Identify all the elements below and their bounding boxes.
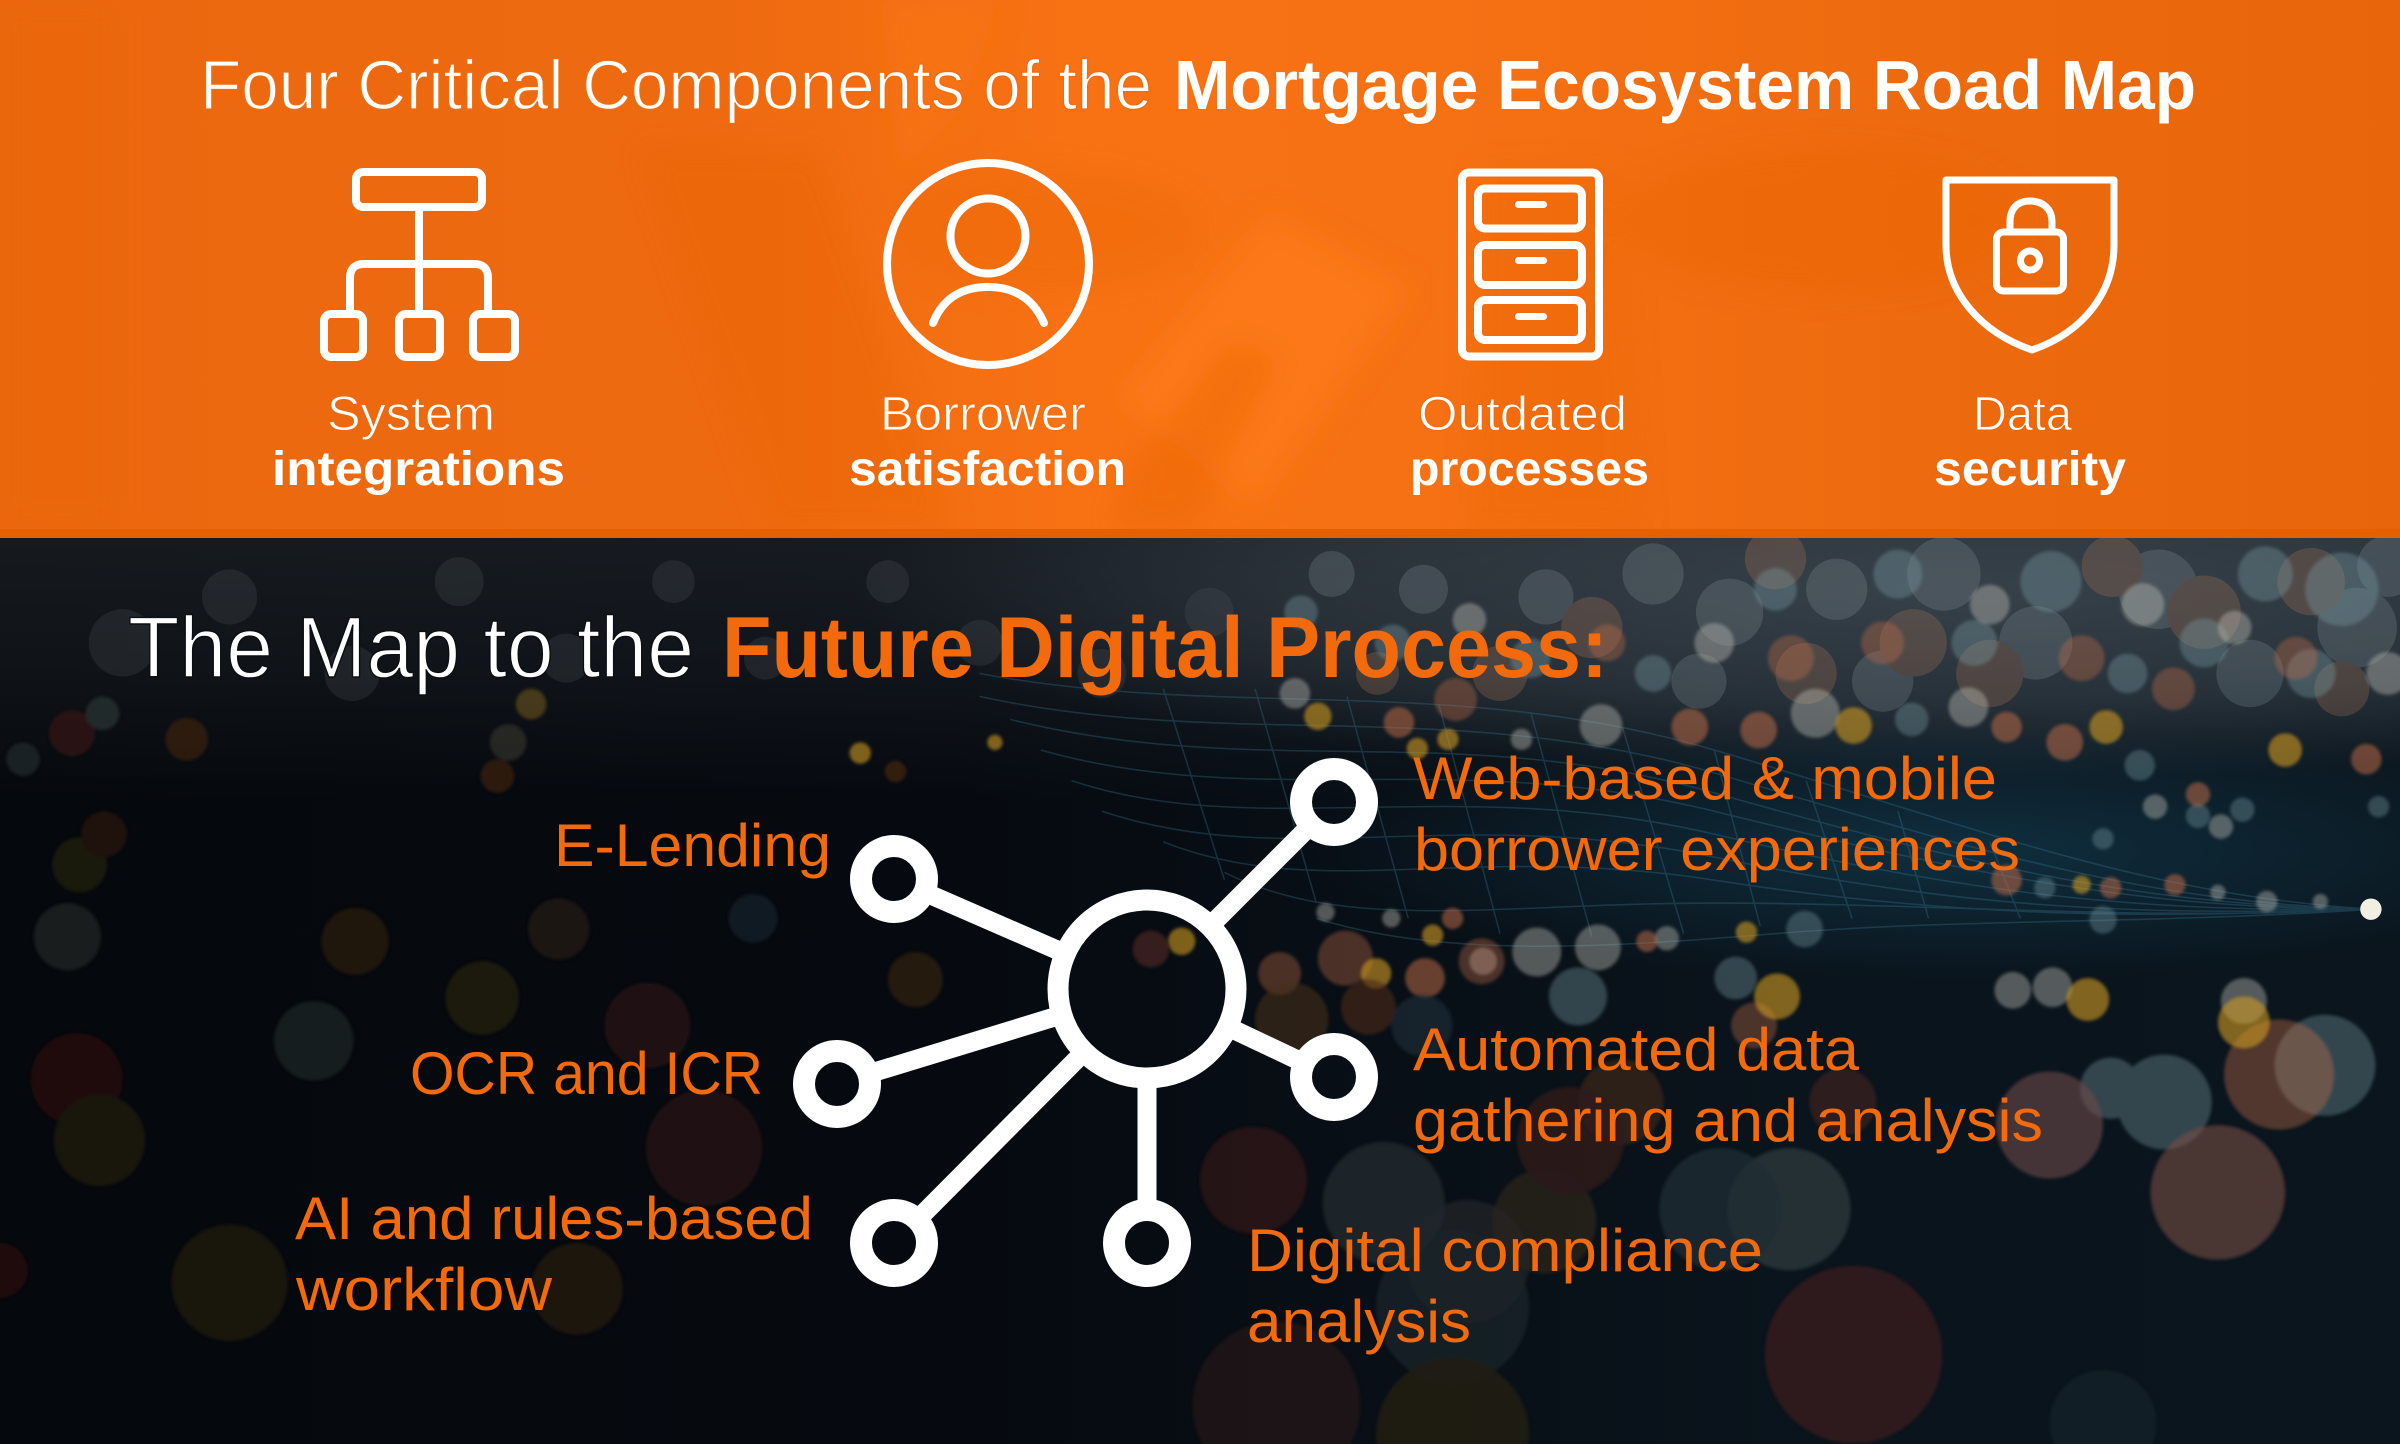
component: system integrations <box>272 172 565 496</box>
label: outdated processes: processes <box>1410 443 1649 496</box>
label: ai and rules-based workflow: AI and rules-based <box>295 1185 813 1252</box>
spoke connectors <box>868 825 1311 1220</box>
label: ocr and icr: OCR and ICR <box>410 1040 763 1107</box>
label: data security: Data <box>1973 388 2072 441</box>
label: borrower satisfaction: Borrower <box>880 388 1086 441</box>
component: borrower satisfaction <box>849 163 1126 496</box>
label: ai and rules-based workflow <box>295 1185 813 1323</box>
component: data security <box>1934 180 2126 496</box>
label: data security <box>1934 388 2126 496</box>
bokeh lights: yellow <box>516 689 2302 1048</box>
label: ai and rules-based workflow: workflow <box>295 1256 553 1323</box>
title: Mortgage Ecosystem Road Map <box>1174 46 2196 124</box>
label: digital compliance: analysis <box>1247 1288 1471 1355</box>
network nodes <box>804 769 1367 1276</box>
label: system integrations: integrations <box>272 443 565 496</box>
label: web-based and mobile: borrower experiences <box>1414 816 2020 883</box>
label: borrower satisfaction: satisfaction <box>849 443 1126 496</box>
label: automated data: Automated data <box>1413 1016 1860 1083</box>
label: automated data: gathering and analysis <box>1413 1087 2043 1154</box>
panel: map to the future digital process <box>0 528 2400 1444</box>
title: Four Critical Components of the <box>200 46 1152 124</box>
icon: person in circle <box>887 163 1089 365</box>
label: web-based and mobile <box>1413 745 2020 883</box>
icon: filing cabinet <box>1462 172 1599 356</box>
bokeh lights: large soft discs <box>0 696 2285 1444</box>
diagram labels <box>295 745 2043 1355</box>
label: automated data <box>1413 1016 2043 1154</box>
label: data security: security <box>1934 443 2126 496</box>
center hub <box>1058 900 1236 1078</box>
heading: The Map to the <box>128 600 694 696</box>
hub and spoke diagram <box>804 769 1367 1276</box>
bright sparkle <box>2360 898 2382 920</box>
bokeh lights: dense hazy band <box>89 528 2400 716</box>
orange photo background <box>0 0 2400 538</box>
bokeh lights: teal <box>1284 546 2389 1149</box>
label: outdated processes: Outdated <box>1418 388 1627 441</box>
mesh wave <box>980 673 2372 946</box>
label: system integrations <box>272 388 565 496</box>
icon: org hierarchy <box>324 172 515 357</box>
label: e-lending: E-Lending <box>554 812 831 879</box>
bokeh lights: orange and pink <box>1258 621 2382 1130</box>
label: digital compliance <box>1247 1217 1763 1355</box>
panel: four critical components <box>0 0 2400 538</box>
dark bokeh background <box>0 528 2400 1444</box>
label: outdated processes <box>1410 388 1649 496</box>
label: borrower satisfaction <box>849 388 1126 496</box>
label: system integrations: System <box>327 388 495 441</box>
label: web-based and mobile: Web-based & mobile <box>1413 745 1997 812</box>
bokeh lights: pale grey <box>1280 583 2400 1024</box>
component: outdated processes <box>1410 172 1649 496</box>
label: digital compliance: Digital compliance <box>1247 1217 1763 1284</box>
heading: Future Digital Process: <box>722 600 1608 696</box>
icon: shield with padlock <box>1946 180 2114 350</box>
